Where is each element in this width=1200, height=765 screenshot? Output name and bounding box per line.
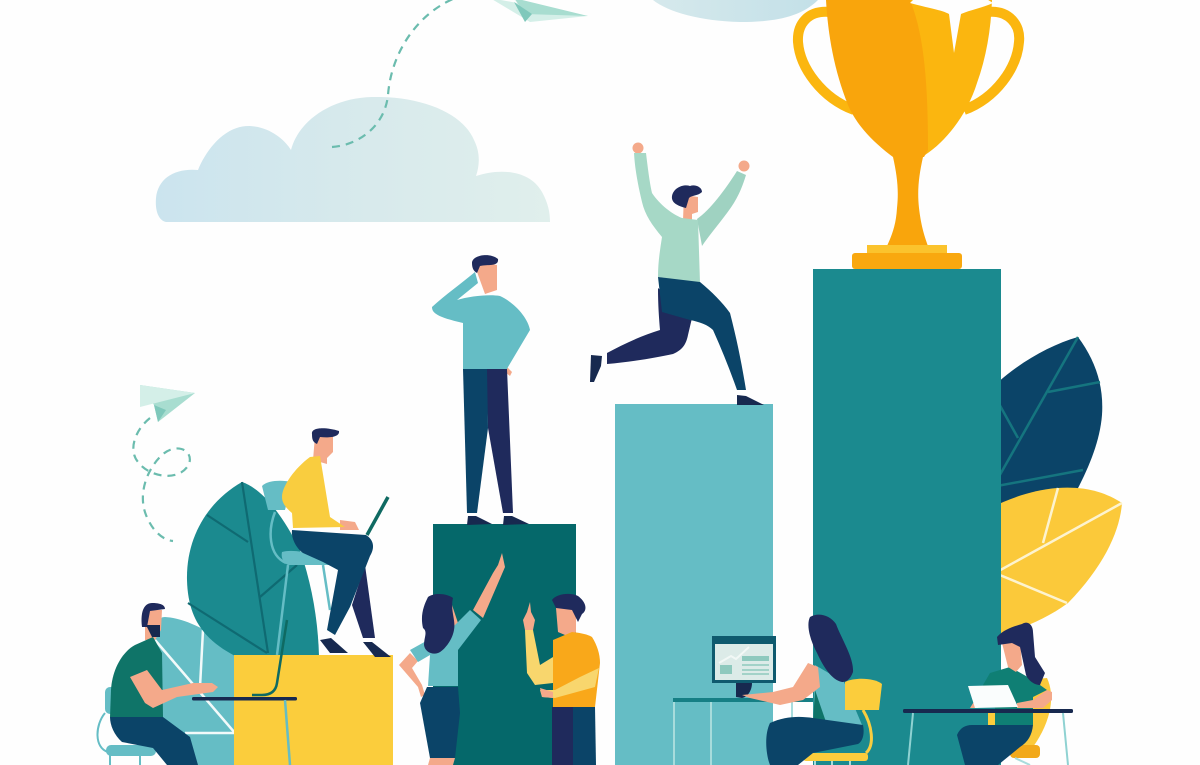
person jumping: [590, 142, 764, 405]
navy leaf: [990, 337, 1102, 510]
trophy: [798, 0, 1019, 269]
hair: [808, 615, 853, 682]
paper plane left: [140, 385, 195, 422]
chair: [1020, 678, 1051, 747]
woman at monitor: [673, 615, 882, 765]
hair: [997, 623, 1045, 685]
arm: [130, 670, 218, 708]
trophy handles: [798, 12, 1019, 110]
laptop: [252, 620, 287, 695]
yellow leaf: [990, 488, 1122, 636]
teal leaf: [187, 482, 319, 656]
chair: [97, 713, 140, 765]
pants: [957, 725, 1033, 765]
pants: [110, 717, 198, 765]
bar 4 tallest: [813, 269, 1001, 765]
shirt: [282, 456, 345, 528]
torso: [813, 665, 862, 725]
desk: [192, 697, 297, 700]
arm: [1017, 690, 1052, 708]
trophy cup left: [826, 0, 928, 157]
far leg: [352, 565, 375, 638]
head: [145, 610, 162, 640]
trophy stem: [887, 157, 928, 246]
trophy cup right: [905, 0, 992, 155]
laptop screen: [367, 497, 388, 535]
desk legs: [908, 713, 1068, 765]
near leg: [292, 530, 373, 635]
man in orange pointing: [523, 594, 600, 765]
woman pointing: [399, 553, 505, 765]
shirt: [983, 667, 1047, 725]
chair: [863, 710, 871, 753]
arm: [742, 663, 820, 705]
bar 2: [433, 524, 576, 765]
face: [1002, 640, 1022, 672]
paper plane top: [490, 0, 588, 22]
trophy star glint: [910, 0, 993, 53]
hand: [340, 520, 359, 530]
head: [313, 436, 333, 464]
woman right with tablet: [903, 623, 1073, 765]
person at left desk with beard: [97, 603, 297, 765]
shirt: [110, 637, 163, 717]
person standing: thinking: [432, 255, 530, 525]
desk: [673, 698, 813, 702]
top cloud: [653, 0, 818, 22]
chair: [271, 512, 330, 655]
light leaf: [140, 617, 238, 765]
desk: [903, 709, 1073, 713]
trophy base: [867, 245, 947, 254]
person seated with laptop: [262, 428, 391, 657]
desk leg: [285, 700, 290, 765]
pants: [766, 717, 864, 765]
shoes: [320, 638, 348, 653]
desk legs: [674, 702, 792, 765]
dashed flight path top: [332, 0, 455, 147]
bar 3: [615, 404, 773, 765]
large cloud: [156, 97, 550, 222]
bar 1 yellow: [234, 655, 393, 765]
monitor: [712, 636, 776, 698]
tablet: [968, 685, 1018, 708]
dashed flight path left: [133, 418, 190, 541]
